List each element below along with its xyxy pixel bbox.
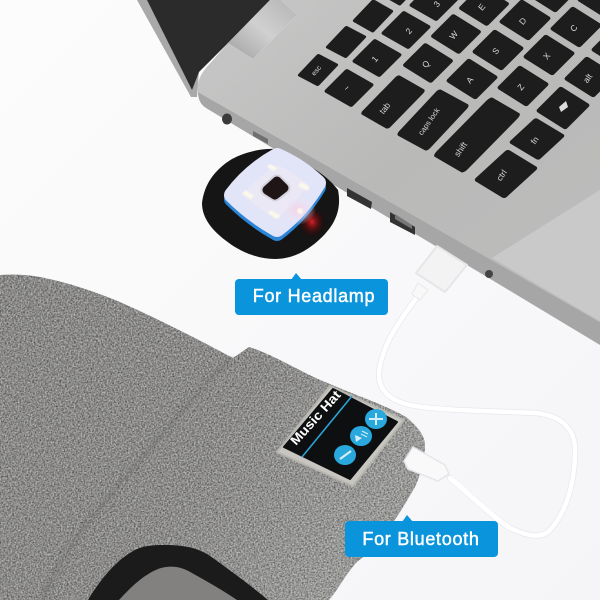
key row: ASDF: A xyxy=(464,74,476,85)
opening inner xyxy=(119,567,237,600)
laptop base top surface xyxy=(198,0,600,322)
key row: ZXCV: shift xyxy=(452,140,469,159)
callout: For Bluetooth xyxy=(345,515,498,557)
callout: For Headlamp: For Headlamp xyxy=(253,286,375,306)
callout: For Headlamp xyxy=(235,273,388,315)
key row: numbers: 1 xyxy=(369,54,380,64)
key row: function xyxy=(297,0,421,86)
key row: QWERTY: E xyxy=(476,1,488,12)
laptop front edge xyxy=(198,92,600,345)
Music Hat control label xyxy=(277,386,404,486)
key row: modifiers xyxy=(474,27,600,199)
key row: QWERTY: tab xyxy=(377,100,392,116)
key row: function: esc xyxy=(311,64,323,77)
key row: ASDF xyxy=(396,0,578,152)
label stitched border xyxy=(277,386,404,486)
key row: ASDF: S xyxy=(490,45,502,56)
button: play/pause xyxy=(350,426,372,446)
front opening black trim xyxy=(88,545,268,600)
keyboard xyxy=(297,0,600,199)
laptop xyxy=(137,0,600,345)
key row: modifiers: alt xyxy=(581,71,595,85)
laptop hinge xyxy=(228,0,297,59)
label text: Music Hat xyxy=(287,387,344,448)
key row: ZXCV: X xyxy=(541,50,553,61)
key row: modifiers: fn xyxy=(528,134,541,146)
USB cable xyxy=(379,297,575,536)
hat knit texture xyxy=(0,275,425,600)
knit hat xyxy=(0,275,425,600)
trackpad area xyxy=(492,190,600,321)
LED chips xyxy=(242,164,310,219)
key row: ZXCV: Z xyxy=(515,82,526,92)
pink reflection xyxy=(280,195,316,225)
key row: ASDF: caps lock xyxy=(416,106,442,137)
headlamp black base xyxy=(202,149,339,259)
key row: QWERTY: W xyxy=(447,29,460,41)
hat body xyxy=(0,275,425,600)
button: plus xyxy=(365,409,387,429)
key row: ASDF: D xyxy=(517,16,529,27)
key row: ZXCV: C xyxy=(568,23,580,34)
cuff fold shadow xyxy=(42,358,233,600)
USB-A plug xyxy=(412,246,467,300)
key row: modifiers: ctrl xyxy=(494,168,509,183)
button: minus xyxy=(334,445,356,465)
headlamp module xyxy=(202,149,339,259)
key row: QWERTY xyxy=(360,0,538,130)
key row: QWERTY: Q xyxy=(420,58,432,70)
label black patch xyxy=(284,389,397,479)
key row: ZXCV xyxy=(432,0,600,174)
label blue line xyxy=(302,396,352,457)
headlamp blue rim xyxy=(232,160,318,233)
laptop ports xyxy=(222,114,493,278)
key row: numbers xyxy=(324,0,460,108)
key row: numbers: 2 xyxy=(403,26,414,36)
key row: numbers: ~ xyxy=(341,83,352,93)
laptop screen lid xyxy=(137,0,270,97)
headlamp power button xyxy=(267,181,284,195)
callout: For Bluetooth: For Bluetooth xyxy=(362,529,480,549)
headlamp translucent cover xyxy=(232,156,318,229)
red LED glow xyxy=(298,206,326,238)
micro USB plug xyxy=(404,447,510,528)
